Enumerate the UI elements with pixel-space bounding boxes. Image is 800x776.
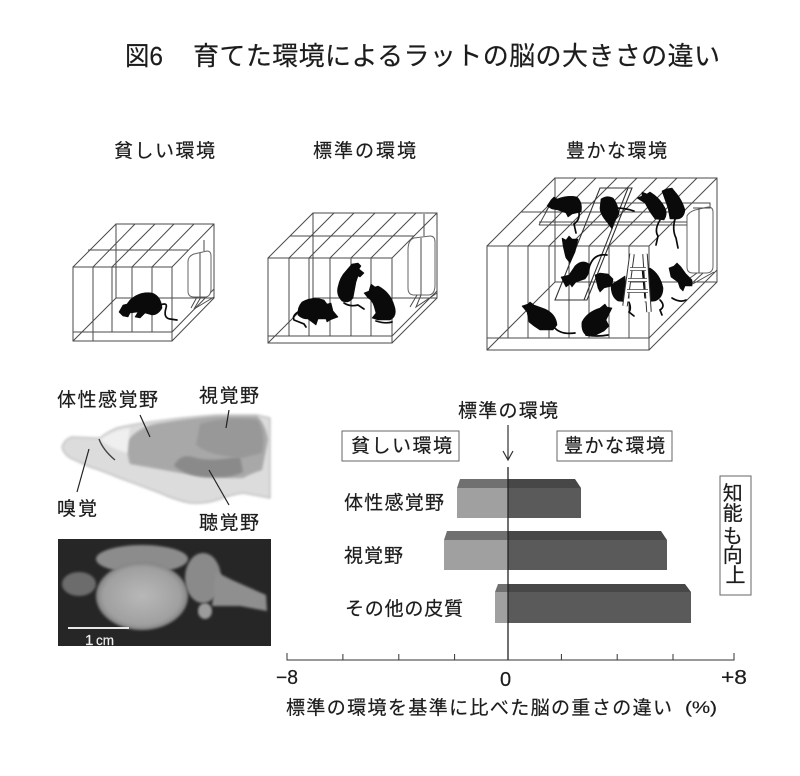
callout: intelligence also improves: 知: [723, 482, 743, 505]
title: 育てた環境によるラットの脳の大きさの違い: [193, 41, 720, 71]
panel: poor environment cage: [73, 224, 214, 341]
callout: intelligence also improves: [720, 476, 751, 595]
icon: water bottle: [188, 240, 214, 309]
axis label: 0: 0: [500, 669, 511, 691]
scale bar: cm: [96, 632, 114, 648]
icon: water bottle: [408, 214, 437, 307]
label: somatosensory area: [57, 389, 158, 437]
icon: ramp: [555, 188, 632, 300]
axis title: 標準の環境を基準に比べた脳の重さの違い: [286, 697, 672, 719]
upper hemisphere: [96, 545, 188, 573]
callout: intelligence also improves: 能: [723, 502, 743, 525]
visual region: [196, 419, 263, 458]
callout: intelligence also improves: 上: [726, 564, 746, 587]
label: auditory area: [199, 470, 259, 534]
arrow: down to zero line: [503, 425, 513, 460]
heading: enriched environment: 豊かな環境: [566, 140, 667, 162]
bar row: somatosensory: [344, 479, 581, 518]
bar row: visual: [344, 531, 667, 570]
legend box: enriched environment: 豊かな環境: [564, 435, 665, 457]
title: 図6: [125, 41, 163, 71]
bar row: other cortex: [345, 584, 691, 623]
scale bar: [68, 627, 129, 649]
brain stem: [212, 572, 267, 611]
heading: standard environment: 標準の環境: [313, 140, 416, 162]
bar row: other cortex: その他の皮質: [345, 598, 463, 620]
icon: rat walking: [294, 298, 338, 327]
panel: enriched environment cage: [487, 178, 717, 350]
icon: ladder: [625, 254, 649, 312]
bar row: somatosensory: 体性感覚野: [344, 492, 444, 514]
label: somatosensory area: 体性感覚野: [57, 389, 158, 411]
boundary stroke: [99, 439, 115, 460]
label: auditory area: 聴覚野: [199, 512, 259, 534]
icon: rat upright: [338, 263, 364, 309]
light patch: [100, 428, 130, 453]
label: visual area: [199, 385, 259, 428]
brain outer shape: [62, 415, 270, 503]
panel: brain photograph: [58, 539, 271, 649]
main hemisphere: [96, 562, 188, 630]
panel: standard environment cage: [268, 213, 437, 343]
legend box: enriched environment: [557, 431, 672, 461]
x axis: [287, 653, 734, 660]
icon: shelf: [539, 203, 710, 225]
label: olfactory: 嗅覚: [57, 498, 97, 520]
bar row: visual: 視覚野: [344, 545, 403, 567]
icon: water bottle: [683, 207, 714, 286]
legend box: poor environment: [342, 431, 459, 461]
zero line: [507, 467, 509, 660]
callout: intelligence also improves: 向: [723, 544, 743, 567]
callout: intelligence also improves: も: [723, 526, 743, 548]
axis title: (%): [685, 698, 717, 717]
olfactory bulb: [62, 572, 96, 596]
axis label: minus 8: −8: [276, 667, 298, 689]
label: visual area: 視覚野: [199, 385, 259, 407]
axis label: plus 8: +8: [721, 667, 747, 689]
chart label: standard environment: 標準の環境: [458, 400, 558, 422]
panel: brain side-view illustration: [62, 415, 270, 503]
lower lobe: [198, 603, 212, 619]
cerebellum: [185, 553, 221, 603]
icon: rat sitting: [364, 284, 395, 323]
scale bar: 1: [85, 632, 93, 649]
heading: poor environment: 貧しい環境: [114, 140, 215, 162]
panel: bar chart: [276, 400, 751, 719]
icon: rat group: [522, 188, 692, 336]
icon: rat: [119, 293, 177, 320]
cortex region: [127, 416, 268, 478]
auditory region: [174, 456, 243, 477]
legend box: poor environment: 貧しい環境: [351, 435, 452, 457]
label: olfactory: [57, 449, 97, 520]
